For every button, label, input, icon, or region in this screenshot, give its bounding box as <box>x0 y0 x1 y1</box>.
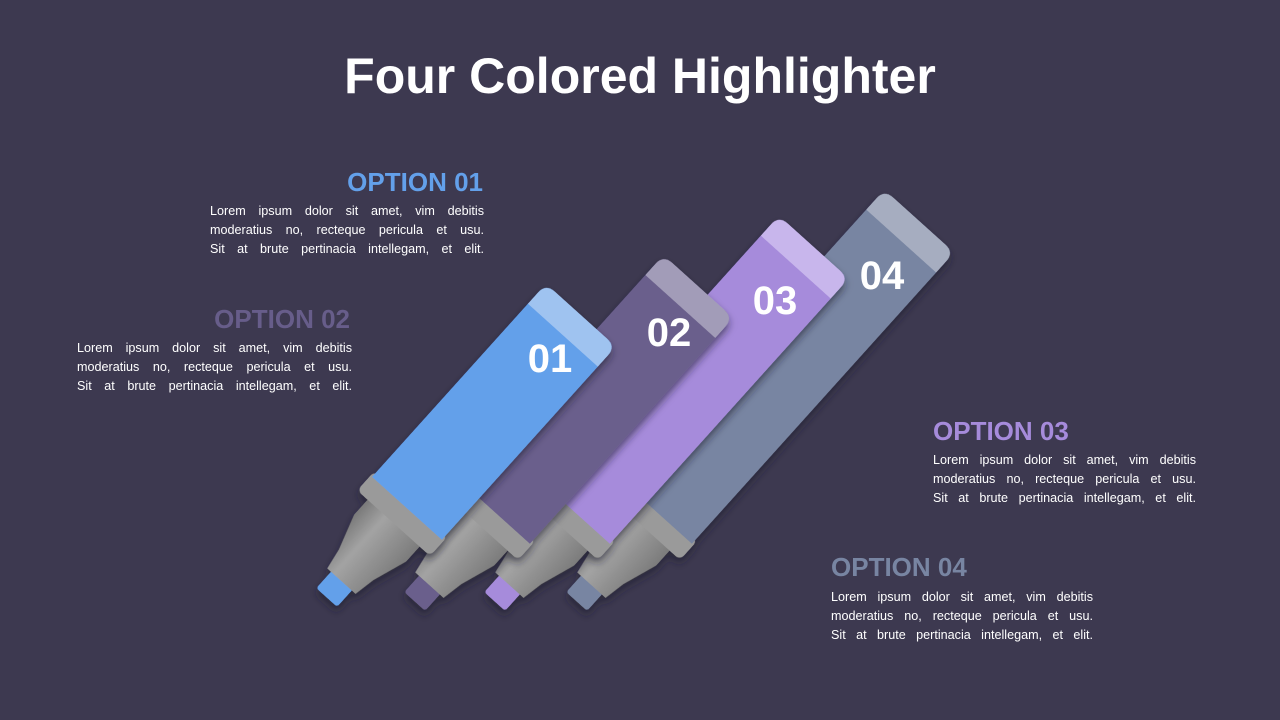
option 01 heading: OPTION 01 <box>347 167 483 197</box>
option 02 text: moderatius no, recteque pericula et usu. <box>77 360 352 374</box>
option 01 text: moderatius no, recteque pericula et usu. <box>210 223 484 237</box>
option 03 text: moderatius no, recteque pericula et usu. <box>933 472 1196 486</box>
option 04 text: Sit at brute pertinacia intellegam, et elit. <box>831 628 1093 642</box>
highlighter 02 <box>378 254 735 634</box>
title: Four Colored Highlighter <box>344 48 936 104</box>
highlighter 01 <box>290 282 617 630</box>
option 03 heading: OPTION 03 <box>933 416 1069 446</box>
option 01 text <box>210 204 484 256</box>
option 03 text: Lorem ipsum dolor sit amet, vim debitis <box>933 453 1196 467</box>
option 03 text <box>933 453 1196 505</box>
option 03 text: Sit at brute pertinacia intellegam, et elit. <box>933 491 1196 505</box>
option 04 text: Lorem ipsum dolor sit amet, vim debitis <box>831 590 1093 604</box>
highlighter 03 <box>458 214 850 634</box>
option 02 text <box>77 341 352 393</box>
option 02 text: Sit at brute pertinacia intellegam, et elit. <box>77 379 352 393</box>
number 04: 04 <box>860 254 904 298</box>
option 04 text: moderatius no, recteque pericula et usu. <box>831 609 1093 623</box>
number 02: 02 <box>647 311 691 355</box>
option 04 text <box>831 590 1093 642</box>
option 01 text: Lorem ipsum dolor sit amet, vim debitis <box>210 204 484 218</box>
number 03: 03 <box>753 279 797 323</box>
option 04 heading: OPTION 04 <box>831 552 967 582</box>
option 02 heading: OPTION 02 <box>214 304 350 334</box>
option 02 text: Lorem ipsum dolor sit amet, vim debitis <box>77 341 352 355</box>
option 01 text: Sit at brute pertinacia intellegam, et elit. <box>210 242 484 256</box>
number 01: 01 <box>528 337 572 381</box>
highlighter 04 <box>540 188 956 634</box>
